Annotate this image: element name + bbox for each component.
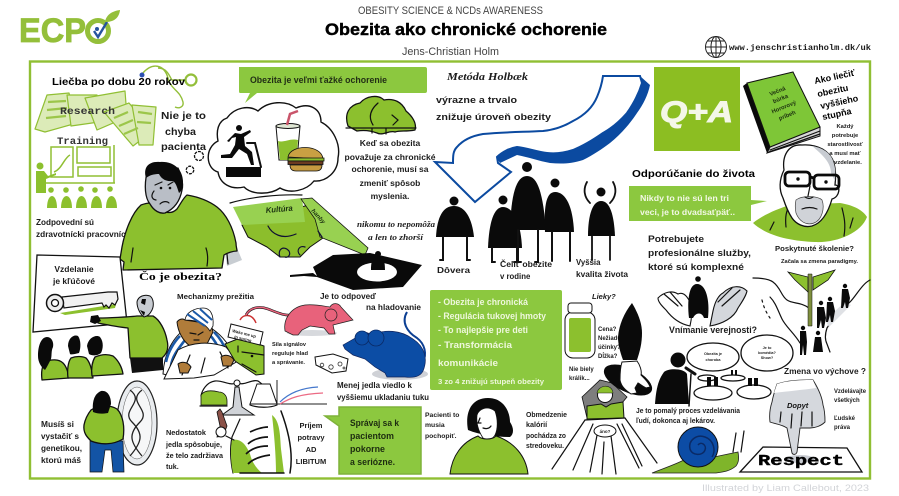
bubble: is it comedy: Je to	[763, 346, 772, 350]
nightstand	[225, 338, 264, 375]
text: reduces obesity	[436, 95, 552, 123]
text: signal strength: a správanie.	[272, 360, 305, 366]
text: educate everyone	[834, 389, 867, 404]
spotlight road	[552, 418, 657, 474]
text: human rights: Ľudské	[834, 416, 856, 422]
text: price, side effects, duration: Dĺžka?	[598, 352, 618, 360]
text: less food, more fat	[337, 381, 429, 402]
icon: cheese	[315, 354, 348, 373]
text: make do with your genetics: genetikou,	[41, 444, 82, 453]
band label: culture: Kultúra	[265, 204, 294, 215]
audience figures	[47, 186, 117, 208]
icon: brain cloud	[346, 96, 416, 134]
text: to starvation: na hladovanie	[366, 303, 422, 312]
text: price, side effects, duration: Nežiaduc	[598, 336, 625, 342]
text: professional services	[648, 234, 751, 272]
speech bubble: treat patients humbly: Správaj sa k	[350, 418, 400, 428]
heading: public perception: Vnímanie verejnosti?	[669, 325, 757, 335]
icon: research papers	[35, 91, 156, 146]
sign: wake me up in spring: in spring	[234, 334, 253, 343]
text: patients must understand: pochopiť.	[425, 433, 457, 440]
speech bubble: serious disease	[239, 67, 427, 103]
panel: Q and A: Q+A	[660, 96, 733, 129]
panel: Q and A	[654, 67, 740, 151]
text: how to treat higher stage obesity: vyššieho	[819, 93, 860, 111]
text: everyone needs care	[827, 124, 863, 166]
heading: what is obesity: Čo je obezita?	[139, 270, 222, 283]
text: professional services: ktoré sú komplexné	[648, 262, 744, 272]
text: lack of food: že telo zadržiava	[166, 451, 224, 460]
text: education is key	[52, 264, 95, 286]
DNA helix	[129, 390, 143, 456]
icon: medicine jar	[565, 303, 595, 358]
text: everyone needs care: a musí mať	[829, 151, 861, 157]
text: calorie restriction: Obmedzenie	[526, 410, 567, 419]
text: not the patient's fault: chyba	[165, 126, 196, 138]
illustration: presenter	[90, 295, 168, 373]
text: not the patient's fault	[161, 110, 206, 153]
speech bubble: treat patients humbly: pokorne	[350, 444, 385, 454]
text: price, side effects, duration: účinky?	[598, 345, 621, 351]
credit: Illustrated by Liam Callebout, 2023	[702, 483, 869, 494]
text: it is a response: Je to odpoveď	[320, 292, 376, 301]
text: does not help anyone: a len to zhorší	[368, 233, 424, 242]
demand label: Dopyt	[787, 401, 809, 410]
label: trust: Dôvera	[437, 265, 470, 275]
chart: weight curves	[277, 380, 327, 404]
panel: green summary list: 3 zo 4 znižujú stupeň obezity	[438, 377, 545, 386]
trainer figure	[36, 162, 56, 193]
figure: family parent	[545, 178, 574, 261]
heading: drugs: Lieky?	[592, 292, 616, 301]
text: lack of food: tuk.	[166, 462, 179, 471]
book title	[765, 84, 801, 124]
text: ad libitum intake: Príjem	[300, 421, 323, 430]
heading: Holbaek method: Metóda Holbæk	[446, 72, 529, 83]
text: price, side effects, duration	[598, 327, 625, 360]
text: human rights	[834, 416, 856, 431]
website url: www.jenschristianholm.dk/uk	[729, 43, 871, 53]
label: higher quality of life: Vyššia	[576, 258, 601, 267]
book title: Hororový	[771, 100, 798, 115]
label: research: Research	[60, 106, 115, 118]
text: less food, more fat: vyššiemu ukladaniu tuku	[337, 393, 429, 402]
text: patients must understand: Pacienti to	[425, 412, 459, 419]
text: everyone needs care: vzdelanie.	[834, 160, 862, 166]
text: calorie restriction: stredoveku.	[526, 441, 564, 450]
illustration: two open hands holding a person	[658, 276, 747, 326]
bubble: is it comedy	[741, 335, 793, 371]
text: change the way of thinking: myslenia.	[371, 191, 409, 201]
text: make do with your genetics: vystačiť s	[41, 432, 80, 441]
illustration: pointing hand with culture and shame bands	[230, 195, 368, 257]
text: how to treat higher stage obesity: obezitu	[816, 83, 849, 99]
text: everyone needs care: Každý	[836, 124, 854, 130]
text: training provided: Poskytnuté školenie?	[775, 244, 854, 253]
panel: green summary list: - Transformácia	[438, 340, 513, 350]
text: reduces obesity: výrazne a trvalo	[436, 95, 517, 106]
thought cloud: treadmill and food	[186, 103, 339, 193]
illustration: respect mat: Respect	[758, 454, 844, 470]
text: education is key: je kľúčové	[52, 276, 95, 286]
text: slow process	[636, 406, 741, 425]
speech bubble: serious disease: Obezita je veľmi ťažké ochorenie	[250, 75, 387, 85]
text: lack of food: jedla spôsobuje,	[165, 440, 222, 449]
text: professional services: Potrebujete	[648, 234, 704, 244]
text: professional services: profesionálne služby,	[648, 248, 751, 258]
text: healthcare workers responsible	[36, 217, 128, 239]
text: slow process: Je to pomalý proces vzdelávania	[636, 406, 741, 415]
heading: treatment for 20 years: Liečba po dobu 20 rokov	[52, 76, 185, 88]
portrait: bald man with glasses	[753, 145, 867, 242]
text: human rights: práva	[834, 425, 851, 431]
icon: green book	[743, 72, 820, 153]
logo: ECPO: ECP	[19, 12, 86, 50]
text: change the way of thinking: Keď sa obezita	[360, 138, 420, 148]
text: change the way of thinking: ochorenie, musí sa	[352, 164, 429, 174]
illustration: ribcage figure	[216, 409, 291, 473]
text: slow process: ľudí, dokonca aj lekárov.	[636, 416, 715, 425]
sign: wake me up in spring: Wake me up	[232, 328, 257, 339]
illustration: crossroads with signpost	[753, 270, 870, 355]
small oval: yes?	[594, 425, 616, 437]
illustration: snail	[652, 427, 744, 473]
illustration: woman in green	[450, 398, 528, 474]
illustration: balance scale	[200, 380, 277, 415]
text: change the way of thinking: zmeniť spôsob	[360, 178, 420, 188]
illustration: presentation audience	[38, 335, 123, 380]
small oval: yes?: áno?	[600, 429, 611, 434]
text: change the way of thinking: považuje za chronické	[344, 152, 436, 162]
text: patients must understand: musia	[425, 422, 445, 429]
illustration: sad man in green sweater	[120, 162, 242, 270]
speech bubble: treat patients humbly: pacientom	[350, 431, 394, 441]
text: lack of food	[165, 428, 224, 471]
text: price, side effects, duration: Cena?	[598, 327, 617, 333]
icon: runner on treadmill	[221, 125, 261, 177]
text: not the patient's fault: Nie je to	[161, 110, 206, 122]
text: education is key: Vzdelanie	[54, 264, 94, 274]
text: ad libitum intake: AD	[306, 445, 317, 454]
text: patients must understand	[425, 412, 459, 440]
panel: education is key board	[33, 255, 127, 332]
text: make do with your genetics: ktorú máš	[41, 456, 82, 465]
label: face obesity in the family: v rodine	[500, 272, 531, 281]
text: signal strength	[272, 342, 308, 366]
speech bubble: treat patients humbly: a seriózne.	[350, 457, 395, 467]
speech bubble: never just three things: Nikdy to nie sú len tri	[640, 193, 729, 203]
book title: príbeh	[778, 110, 797, 122]
text: educate everyone: Vzdelávajte	[834, 389, 867, 395]
panel: green summary list: - Obezita je chronická	[438, 297, 529, 307]
text: not the patient's fault: pacienta	[161, 141, 206, 153]
illustration: respect mat	[740, 447, 862, 472]
ink spill with small person	[290, 251, 422, 290]
text: make do with your genetics: Musíš si	[41, 420, 74, 429]
walkers	[800, 284, 850, 355]
text: signal strength: Sila signálov	[272, 342, 307, 348]
label: training: Training	[57, 136, 108, 148]
title: Obezita ako chronické ochorenie	[325, 21, 607, 39]
illustration: pressing hand labelled demand	[770, 380, 825, 454]
text: everyone needs care: potrebuje	[832, 133, 859, 139]
speech bubble: never just three things	[629, 186, 767, 221]
text: lack of food: Nedostatok	[166, 428, 206, 437]
heading: survival mechanisms: Mechanizmy prežitia	[177, 292, 255, 301]
icon: stethoscope	[140, 66, 196, 108]
text: less food, more fat: Menej jedla viedlo k	[337, 381, 413, 390]
bubble: obesity is a disease	[687, 343, 739, 371]
text: no white rabbit: králik...	[569, 376, 590, 382]
illustration: speaker with audience ovals	[655, 335, 793, 406]
text: no white rabbit: Nie biely	[569, 367, 594, 373]
text: change the way of thinking	[344, 138, 436, 201]
speech bubble: treat patients humbly	[325, 407, 421, 474]
main frame	[30, 62, 870, 478]
text: calorie restriction: kalórií	[526, 420, 548, 429]
glasses	[785, 172, 839, 189]
heading: change in education: Zmena vo výchove ?	[784, 366, 866, 376]
text: how to treat higher stage obesity	[813, 67, 860, 122]
panel: green summary list	[430, 290, 562, 390]
text: ad libitum intake: LIBITUM	[296, 457, 326, 466]
illustration: blue rat	[343, 312, 428, 380]
speech bubble: never just three things: veci, je to dvadsaťpäť..	[640, 207, 735, 217]
icon: soft drink cup	[276, 111, 300, 160]
label: higher quality of life: kvalita života	[576, 270, 629, 279]
text: healthcare workers responsible: Zodpovední sú	[36, 217, 94, 227]
text: how to treat higher stage obesity: stupňa	[821, 106, 853, 122]
bubble: obesity is a disease: choroba	[706, 358, 721, 362]
bubble: obesity is a disease: Obezita je	[704, 352, 722, 356]
label: face obesity in the family	[500, 260, 553, 281]
text: educate everyone: všetkých	[834, 398, 860, 404]
bubble: is it comedy: Show?	[761, 356, 774, 360]
figure: trust	[436, 196, 474, 260]
text: make do with your genetics	[41, 420, 82, 465]
logo: ECPO	[19, 10, 120, 50]
text: signal strength: reguluje hlad	[272, 351, 308, 357]
training board with audience	[36, 145, 117, 208]
text: how to treat higher stage obesity: Ako liečiť	[813, 67, 857, 86]
icon: globe	[706, 36, 726, 58]
panel: green summary list: - To najlepšie pre deti	[438, 325, 528, 335]
sign: wake me up in spring	[228, 315, 263, 345]
text: no white rabbit	[569, 367, 594, 382]
five black figures	[436, 162, 615, 262]
text: everyone needs care: starostlivosť	[827, 142, 863, 148]
text: ad libitum intake	[296, 421, 326, 466]
arrow: blue curved arrow down to people	[435, 76, 650, 202]
text: healthcare workers responsible: zdravotnícki pracovníci	[36, 229, 128, 239]
heading: life recommendation: Odporúčanie do života	[632, 169, 756, 180]
label: higher quality of life	[576, 258, 629, 279]
band label: shame: hanby	[310, 208, 326, 226]
panel: green summary list: komunikácie	[438, 358, 498, 368]
panel: green summary list: - Regulácia tukovej hmoty	[438, 311, 546, 321]
text: reduces obesity: znižuje úroveň obezity	[436, 112, 552, 123]
header: awareness line: OBESITY SCIENCE & NCDs AWARENESS	[358, 5, 543, 17]
illustration: woman at DNA mirror	[84, 381, 157, 472]
text: does not help anyone: nikomu to nepomôža	[357, 220, 435, 229]
book title: Večná	[769, 86, 787, 98]
author: Jens-Christian Holm	[402, 46, 499, 58]
bubble: is it comedy: komédia?	[758, 351, 777, 355]
illustration: pink rat	[246, 304, 353, 336]
figure: family parent small	[488, 196, 522, 262]
figure: arms raised	[585, 182, 615, 260]
book title: búrka	[772, 93, 790, 105]
icon: key	[46, 292, 118, 315]
figure: tall adult	[510, 162, 546, 262]
text: calorie restriction	[526, 410, 567, 450]
text: calorie restriction: pochádza zo	[526, 431, 567, 440]
label: face obesity in the family: Čeliť obezite	[500, 260, 553, 269]
illustration: arm pulling doctor out of hat	[552, 303, 657, 474]
text: ad libitum intake: potravy	[297, 433, 325, 442]
text: does not help anyone	[357, 220, 435, 242]
text: paradigm shift: Začala sa zmena paradigmy.	[781, 259, 858, 265]
icon: burger	[288, 147, 324, 171]
illustration: hibernating bear in bed	[163, 308, 264, 379]
